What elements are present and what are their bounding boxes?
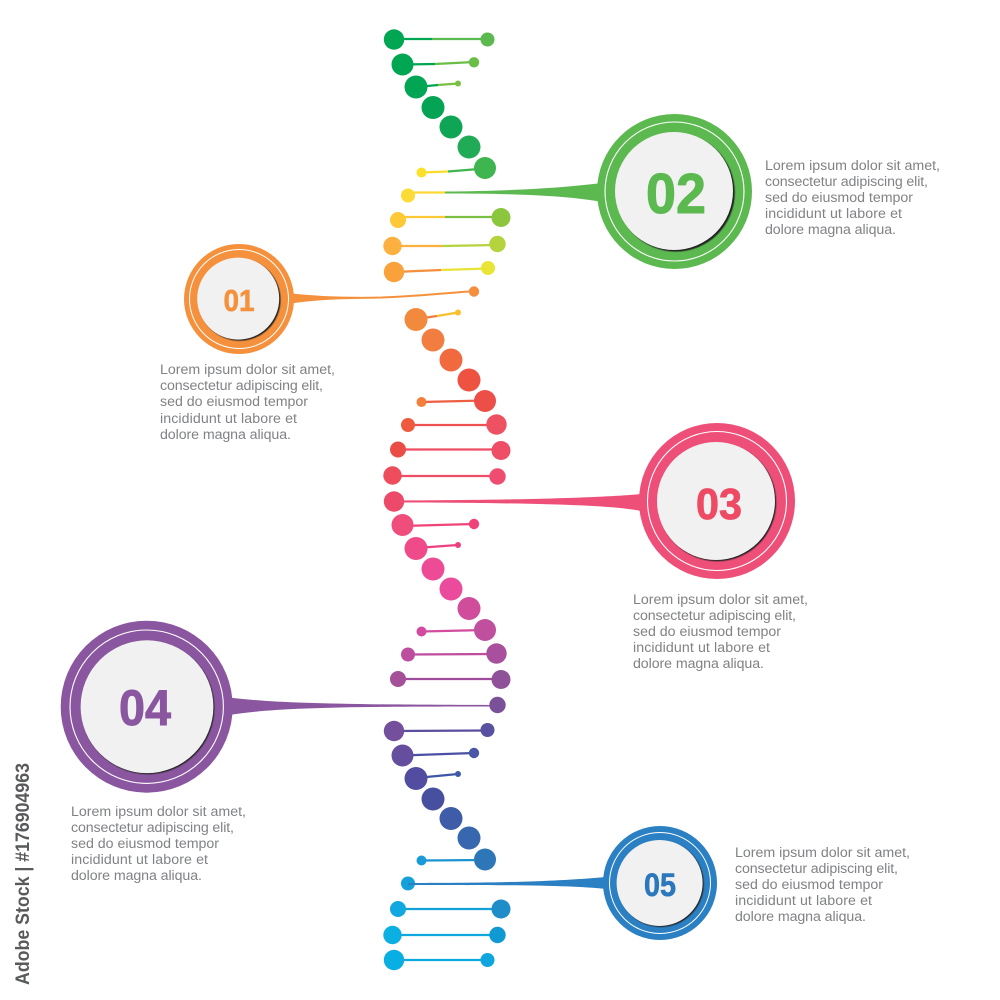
text block 05 <box>735 845 910 925</box>
base pair 19 <box>401 643 507 664</box>
base pair 24 <box>404 767 461 790</box>
badge 01 <box>184 244 294 354</box>
text block 03: consectetur adipiscing elit, <box>633 608 796 624</box>
text block 02 <box>765 158 940 238</box>
base pair 13 <box>390 441 510 460</box>
text block 02: Lorem ipsum dolor sit amet, <box>765 158 940 174</box>
text block 05: incididunt ut labore et <box>735 893 872 909</box>
number 03: 03 <box>696 480 742 529</box>
connector 05 <box>408 877 606 889</box>
base pair 27 <box>390 900 510 918</box>
base pair 7 <box>383 236 506 255</box>
text block 03: incididunt ut labore et <box>633 640 770 656</box>
connector 02 <box>445 183 602 202</box>
number 05: 05 <box>644 867 676 903</box>
text block 02: dolore magna aliqua. <box>765 222 896 238</box>
number 04: 04 <box>119 680 171 736</box>
badge 02 <box>597 114 752 269</box>
text block 01 <box>160 362 335 443</box>
text block 02: sed do eiusmod tempor <box>765 190 913 206</box>
text block 01: sed do eiusmod tempor <box>160 394 308 410</box>
base pair 6 <box>390 208 510 228</box>
text block 01: dolore magna aliqua. <box>160 427 291 443</box>
base pair 10 <box>404 308 461 331</box>
text block 04: consectetur adipiscing elit, <box>71 820 234 836</box>
base pair 14 <box>383 466 506 485</box>
text block 02: consectetur adipiscing elit, <box>765 174 928 190</box>
text block 04: Lorem ipsum dolor sit amet, <box>71 804 246 820</box>
text block 05: sed do eiusmod tempor <box>735 877 883 893</box>
text block 01: incididunt ut labore et <box>160 411 297 427</box>
text block 04: incididunt ut labore et <box>71 852 208 868</box>
text block 03: sed do eiusmod tempor <box>633 624 781 640</box>
text block 05: Lorem ipsum dolor sit amet, <box>735 845 910 861</box>
base pair 9 <box>469 286 479 297</box>
base pair 22 <box>384 721 494 741</box>
text block 04: dolore magna aliqua. <box>71 868 202 884</box>
base pair 25 <box>416 848 496 870</box>
vertical stock credit: Adobe Stock | #176904963 <box>13 763 34 985</box>
base pair 12 <box>401 414 507 435</box>
callout 01 <box>184 244 473 354</box>
connector 04 <box>229 698 490 715</box>
base pair 18 <box>416 619 496 641</box>
base pair 23 <box>392 744 479 766</box>
badge 05 <box>603 826 717 940</box>
backbone beads orange <box>422 328 480 392</box>
text block 03: Lorem ipsum dolor sit amet, <box>633 592 808 608</box>
base pair 11 <box>416 390 496 412</box>
callout 02 <box>445 114 752 269</box>
callout 05 <box>408 826 717 940</box>
backbone beads pink <box>422 558 480 620</box>
badge 03 <box>639 423 795 579</box>
base pair 3 <box>404 76 461 98</box>
base pair 15 <box>384 491 404 512</box>
base pair 16 <box>392 514 479 536</box>
text block 05: dolore magna aliqua. <box>735 909 866 925</box>
base pair 5 <box>401 188 445 202</box>
base pair 17 <box>404 537 461 560</box>
badge 04 <box>61 621 233 793</box>
text block 03: dolore magna aliqua. <box>633 656 764 672</box>
base pair 28 <box>383 926 506 944</box>
text block 04 <box>71 804 246 884</box>
number 01: 01 <box>224 283 254 318</box>
connector 01 <box>288 290 473 304</box>
connector 03 <box>400 494 642 511</box>
text block 02: incididunt ut labore et <box>765 206 902 222</box>
backbone beads green <box>422 96 480 158</box>
text block 04: sed do eiusmod tempor <box>71 836 219 852</box>
text block 05: consectetur adipiscing elit, <box>735 861 898 877</box>
base pair 21 <box>489 697 506 713</box>
base pair 20 <box>390 670 510 689</box>
text block 03 <box>633 592 808 672</box>
text block 01: consectetur adipiscing elit, <box>160 378 323 394</box>
base pair 4 <box>416 157 496 179</box>
backbone beads blue <box>422 788 480 850</box>
callout 03 <box>400 423 795 579</box>
callout 04 <box>61 621 490 793</box>
DNA helix <box>383 29 510 970</box>
base pair 26 <box>401 876 415 890</box>
base pair 2 <box>392 54 479 76</box>
base pair 8 <box>384 261 495 282</box>
base pair 29 <box>384 950 494 970</box>
text block 01: Lorem ipsum dolor sit amet, <box>160 362 335 378</box>
number 02: 02 <box>646 162 706 226</box>
base pair 1 <box>384 29 494 50</box>
